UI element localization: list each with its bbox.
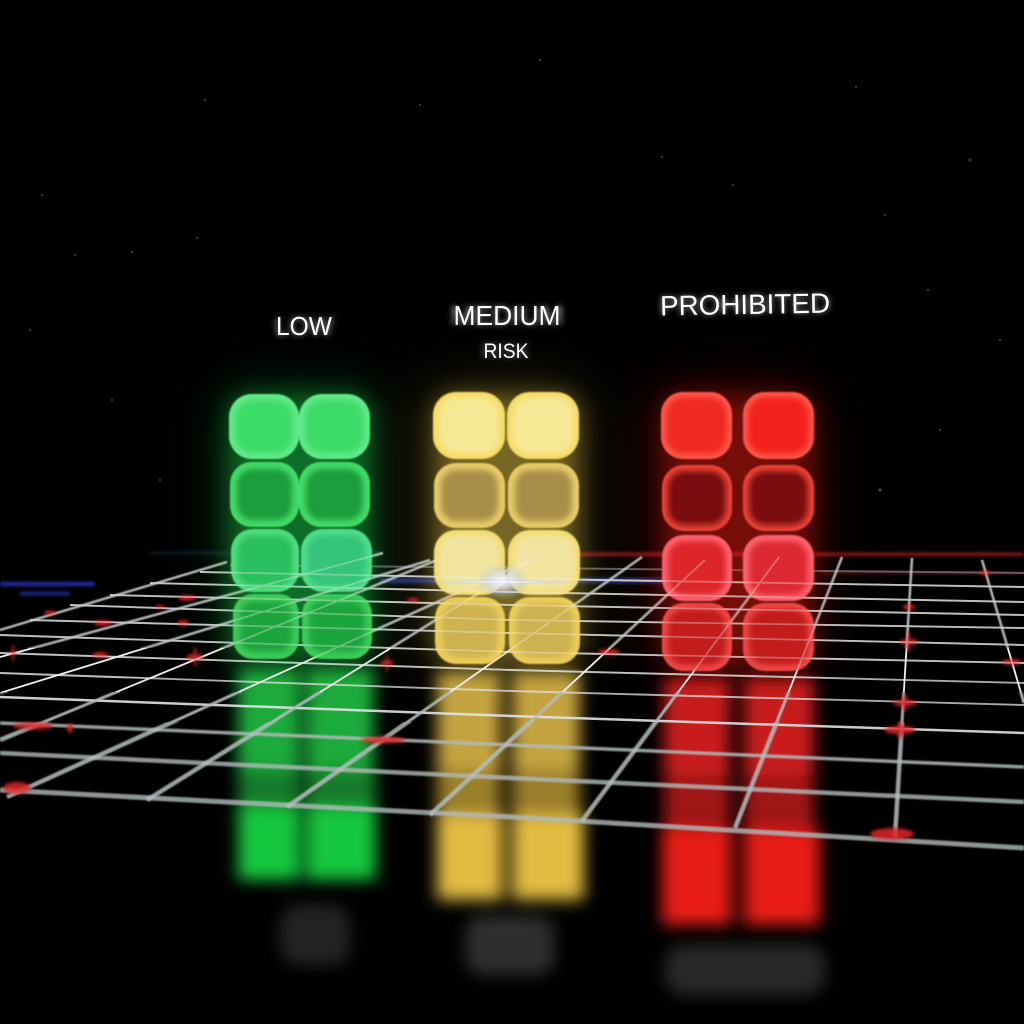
ambient glow behind tiers <box>225 390 815 660</box>
glow halo: low <box>228 394 372 659</box>
row 2: medium <box>434 463 579 528</box>
reflection: low <box>238 668 376 965</box>
reflection: prohibited <box>662 678 825 995</box>
row 3: low <box>231 529 372 592</box>
floor reflections of tiers <box>238 668 825 995</box>
label: MEDIUM RISK: MEDIUM <box>454 300 560 331</box>
red grid node sparks <box>3 571 1022 840</box>
label: PROHIBITED: PROHIBITED <box>659 288 831 321</box>
label: MEDIUM RISK <box>450 300 564 363</box>
reflection: medium <box>437 672 584 975</box>
glow halo: prohibited <box>662 394 814 669</box>
row 3: prohibited <box>662 535 814 601</box>
grid overlay on blocks <box>0 552 1024 678</box>
tier: low <box>228 394 372 659</box>
row 1: medium <box>433 392 579 459</box>
row 3: medium <box>434 530 580 595</box>
label: MEDIUM RISK: MEDIUM <box>450 300 564 331</box>
grid floor <box>0 553 1024 848</box>
row 2: low <box>230 462 370 527</box>
glow halo: medium <box>434 394 580 664</box>
row 1: low <box>229 394 370 459</box>
tier: prohibited <box>661 392 814 671</box>
label: LOW: LOW <box>276 311 332 341</box>
lens flare <box>423 564 583 600</box>
row 4: prohibited <box>662 603 814 671</box>
row 4: low <box>233 594 372 659</box>
label: MEDIUM RISK: RISK <box>481 340 531 363</box>
row 4: medium <box>435 597 580 664</box>
label: MEDIUM RISK: RISK <box>484 340 528 363</box>
label: PROHIBITED: PROHIBITED <box>660 288 830 321</box>
starfield <box>29 59 1001 492</box>
label: LOW: LOW <box>274 311 334 341</box>
horizontal lines <box>0 723 1024 848</box>
row 2: prohibited <box>662 465 814 531</box>
row 1: prohibited <box>661 392 814 459</box>
converging lines <box>0 553 1024 837</box>
horizon glow <box>0 552 1024 595</box>
tier: medium <box>433 392 580 664</box>
